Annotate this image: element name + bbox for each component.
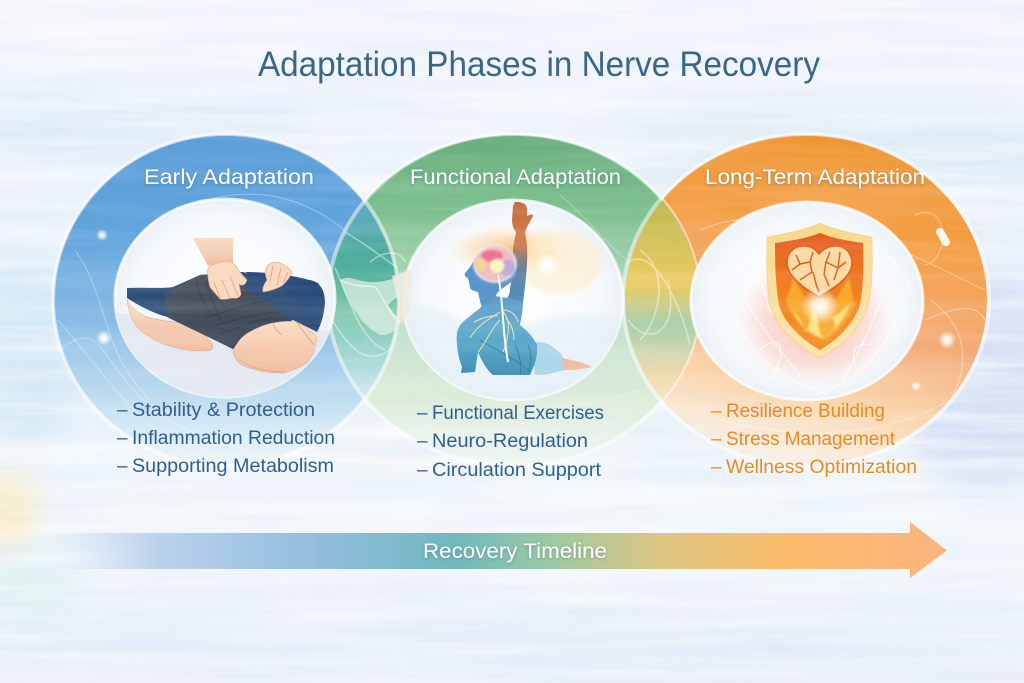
overlap: blue and green (53, 134, 700, 466)
wave curves (332, 232, 405, 356)
list: early adaptation: Stability & Protection (132, 400, 315, 421)
right hand (263, 262, 292, 292)
illustration: person stretching with glowing brain (392, 200, 623, 400)
illustration: shield with heart-brain (691, 202, 923, 400)
brain (474, 246, 516, 282)
list: early adaptation (117, 400, 335, 477)
orange ring (625, 135, 987, 465)
heading: long-term adaptation: Long-Term Adaptation (705, 165, 925, 189)
arm (193, 238, 233, 266)
green ring highlights (400, 195, 640, 430)
raised arm (507, 202, 533, 302)
torso folds (480, 340, 531, 375)
list: long-term adaptation: Resilience Building (726, 401, 885, 422)
translucent veil (340, 273, 408, 335)
foot (562, 358, 592, 370)
list: functional adaptation: Neuro-Regulation (432, 431, 588, 452)
sparkle (537, 254, 556, 274)
band ridges (196, 280, 280, 334)
flames (786, 276, 855, 340)
list: functional adaptation (417, 403, 604, 481)
wave curves (625, 250, 690, 345)
list: long-term adaptation: – (711, 401, 722, 422)
pink nerve glow (742, 278, 888, 380)
right hand fingers (270, 266, 288, 286)
inner disc (403, 200, 623, 400)
heart veins (792, 252, 846, 292)
title: Adaptation Phases in Nerve Recovery (258, 45, 820, 84)
panel: functional adaptation (328, 135, 700, 465)
list: long-term adaptation: Wellness Optimization (726, 457, 917, 478)
illustration: compression support on leg (110, 199, 340, 400)
left hand fingers (214, 276, 238, 298)
nerves (470, 310, 518, 352)
blue ring (54, 135, 398, 465)
green ring (328, 135, 700, 465)
shield interior (775, 233, 863, 350)
panel: early adaptation (54, 135, 398, 465)
list: early adaptation: – (117, 456, 128, 477)
head silhouette (465, 246, 517, 308)
spine (498, 275, 508, 362)
nerve filaments (710, 250, 912, 395)
orange ring highlights (700, 213, 985, 440)
heading: early adaptation: Early Adaptation (144, 165, 314, 189)
arrow: recovery timeline (50, 522, 947, 578)
list: functional adaptation: – (417, 431, 428, 452)
misty background (403, 306, 623, 400)
heart-shaped brain (787, 246, 852, 297)
grey compression band (165, 273, 293, 349)
shield frame (767, 223, 872, 358)
lower leg and foot (127, 300, 213, 351)
list: functional adaptation: – (417, 403, 428, 424)
leg (532, 342, 565, 375)
upper navy fold (245, 272, 320, 286)
rims (53, 134, 399, 466)
list: functional adaptation: Functional Exercises (432, 403, 604, 424)
heading: functional adaptation: Functional Adaptation (410, 165, 621, 189)
core glow (801, 287, 839, 325)
navy shorts (127, 272, 325, 349)
list: early adaptation: Supporting Metabolism (132, 456, 334, 477)
knee (233, 321, 317, 373)
orange ring sparks (911, 226, 956, 391)
list: early adaptation: Inflammation Reduction (132, 428, 335, 449)
back arm (229, 260, 234, 263)
inner disc (115, 199, 335, 397)
list: functional adaptation: – (417, 460, 428, 481)
torso (457, 296, 537, 375)
veil tip at disc edge (392, 270, 412, 322)
list: long-term adaptation: – (711, 457, 722, 478)
warm corner glow (0, 472, 38, 548)
floor (116, 313, 328, 397)
list: long-term adaptation: – (711, 429, 722, 450)
list: early adaptation: – (117, 428, 128, 449)
panel: long-term adaptation (625, 135, 987, 465)
blue ring highlights (58, 194, 365, 460)
left hand (208, 261, 247, 299)
knee crease (240, 322, 314, 372)
silky sheen over circles (50, 130, 995, 470)
list: early adaptation: – (117, 400, 128, 421)
list: functional adaptation: Circulation Support (432, 460, 602, 481)
list: long-term adaptation (711, 401, 917, 478)
overlap: green and orange (622, 132, 991, 465)
orange energy glow (453, 227, 560, 269)
label: recovery timeline: Recovery Timeline (423, 540, 607, 563)
rims (623, 134, 989, 466)
list: long-term adaptation: Stress Management (726, 429, 896, 450)
inner disc (691, 202, 923, 400)
